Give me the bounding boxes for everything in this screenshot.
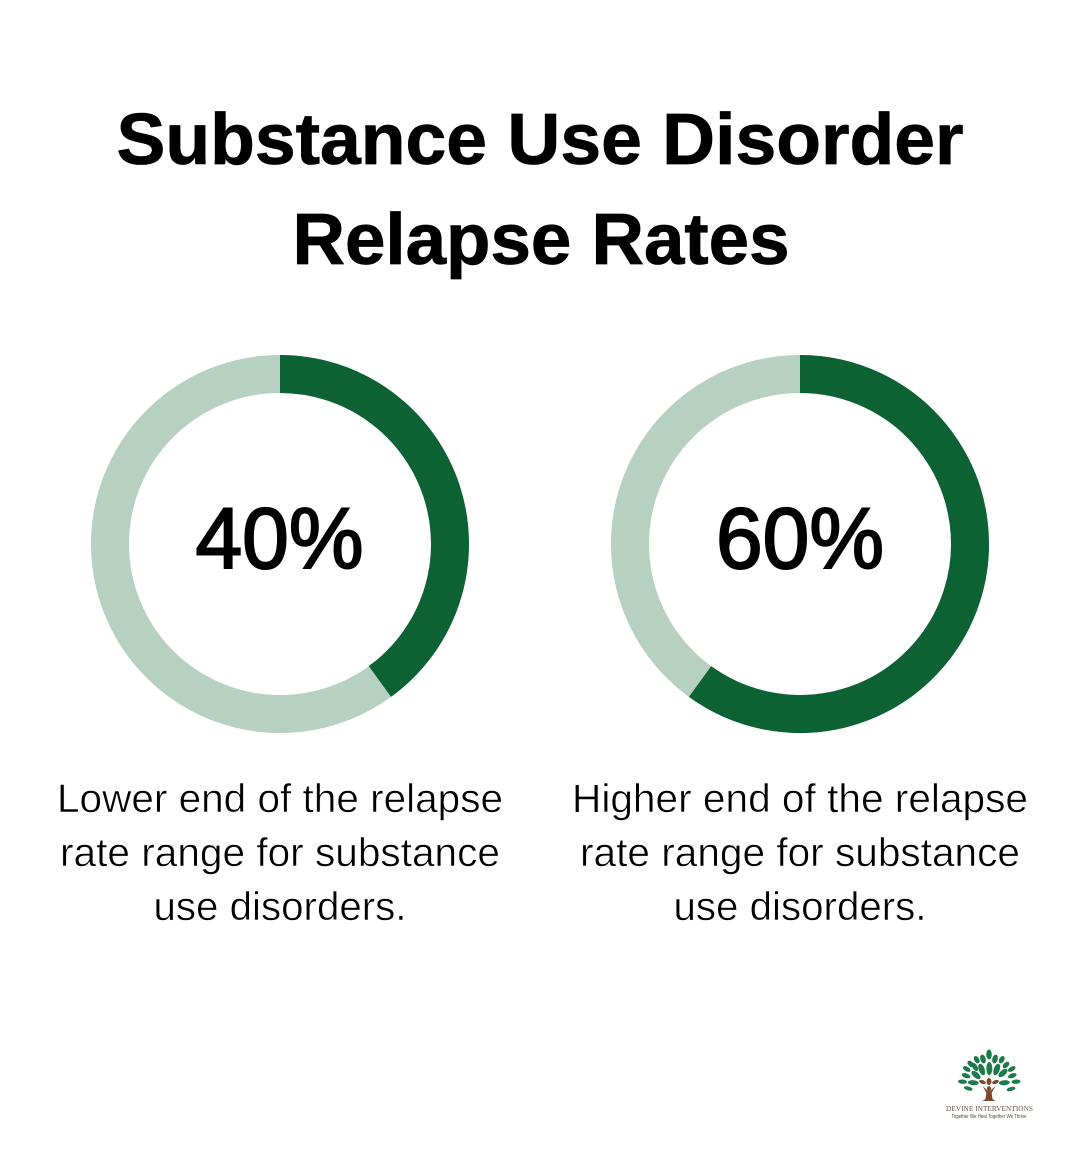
- description: lower end: rate range for substance: [60, 831, 500, 875]
- logo name: DEVINE INTERVENTIONS: [946, 1105, 1033, 1113]
- description: lower end: use disorders.: [154, 885, 406, 929]
- icon: tree: [958, 1050, 1021, 1101]
- logo tagline: Together We Heal Together We Thrive: [952, 1114, 1027, 1120]
- donut chart: 60%: [630, 374, 970, 714]
- description: higher end: rate range for substance: [580, 831, 1020, 875]
- title: [116, 100, 964, 280]
- donut chart: 40%: [110, 374, 450, 714]
- logo: Devine Interventions: [946, 1050, 1033, 1120]
- title: Relapse Rates: [292, 200, 790, 280]
- value: 40%: 40%: [196, 491, 364, 587]
- description: higher end: [572, 777, 1028, 929]
- description: higher end: Higher end of the relapse: [572, 777, 1028, 821]
- description: higher end: use disorders.: [674, 885, 926, 929]
- description: lower end: [57, 777, 503, 929]
- value: 60%: 60%: [716, 491, 884, 587]
- panel: 40% lower end: [57, 374, 503, 929]
- title: Substance Use Disorder: [116, 100, 964, 180]
- panel: 60% higher end: [572, 374, 1028, 929]
- description: lower end: Lower end of the relapse: [57, 777, 503, 821]
